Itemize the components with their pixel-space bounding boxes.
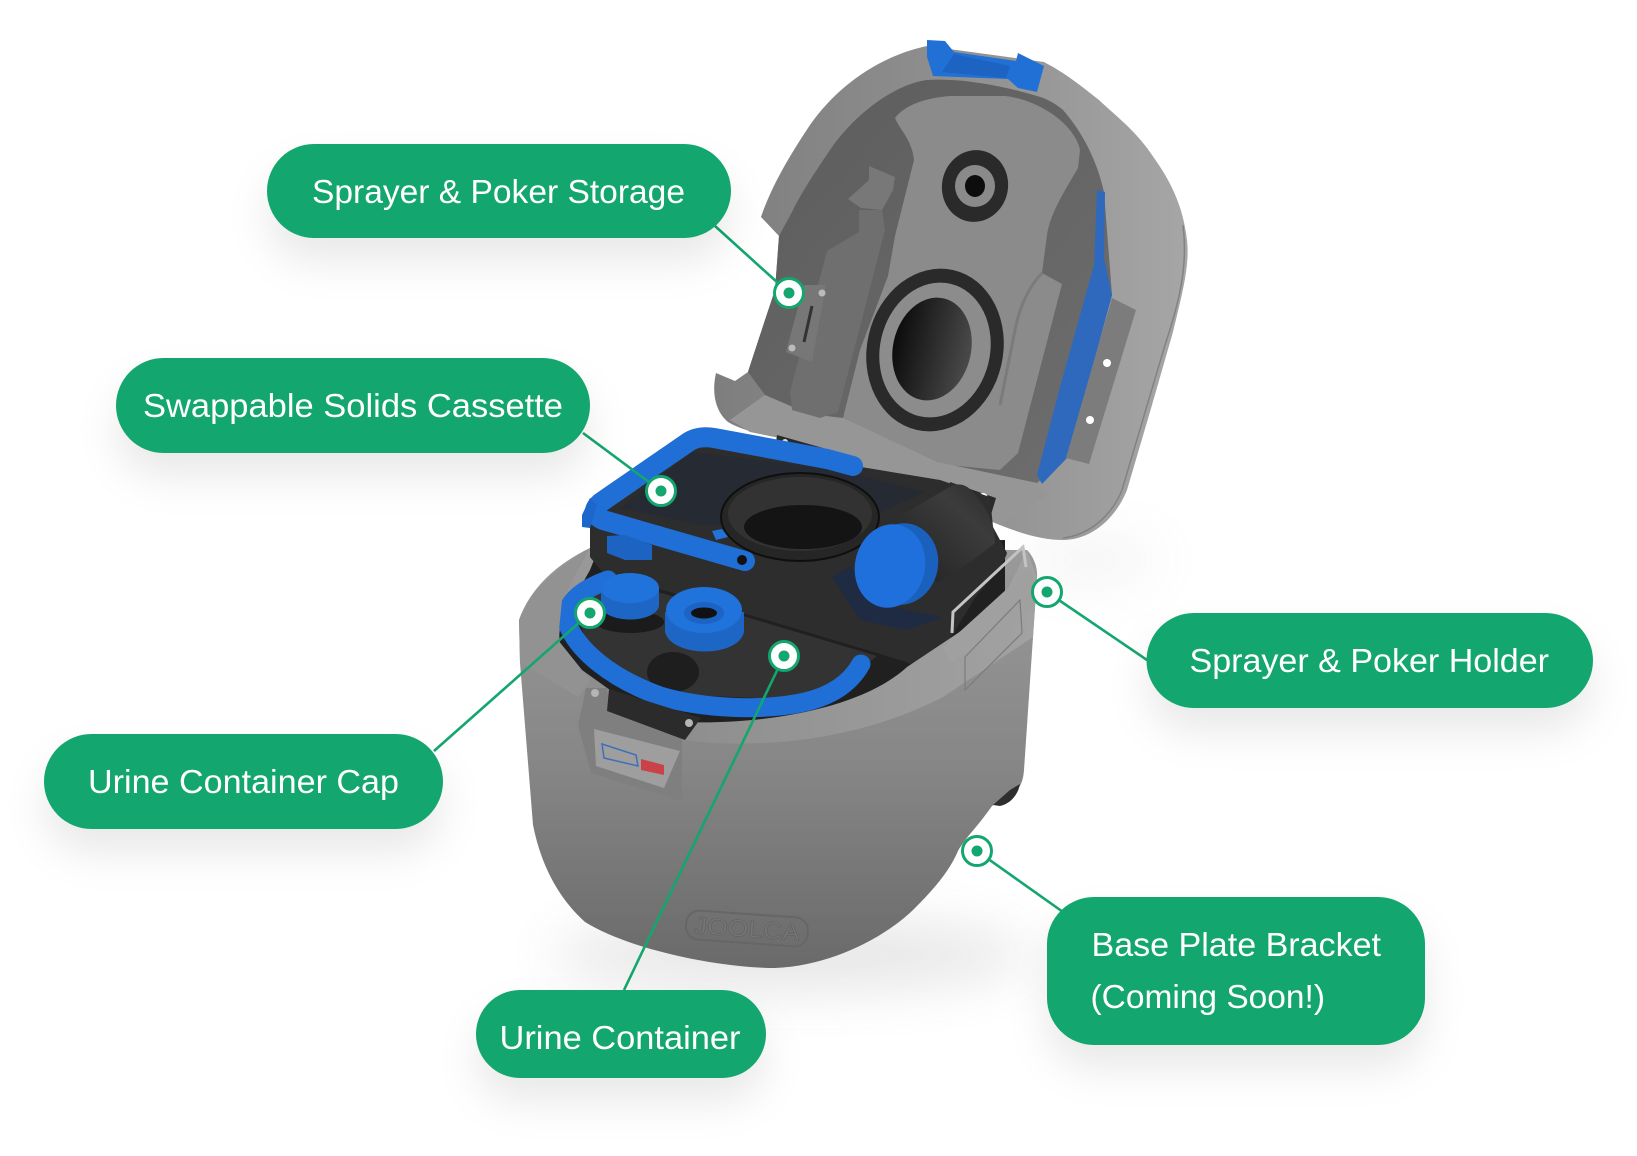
latch: [927, 40, 1044, 92]
small port: [935, 144, 1015, 228]
container recess: [647, 652, 699, 692]
callout: Swappable Solids Cassette: [116, 358, 676, 506]
callout: Sprayer & Poker Storage: [267, 144, 804, 308]
callout: Sprayer & Poker Storage: Sprayer & Poker Storage: [312, 173, 685, 210]
navy patch: [832, 567, 943, 630]
urine container: [567, 573, 877, 708]
callout: Sprayer & Poker Holder: [1032, 578, 1593, 708]
ground shadow: [550, 542, 1160, 991]
logo embossed: JOOLCA: [693, 912, 801, 947]
hinges: [775, 435, 996, 518]
level indicator window: [578, 688, 701, 801]
pour cap: [665, 587, 744, 652]
base rim: [519, 548, 1037, 744]
lid cavity: [748, 80, 1112, 483]
callout: Swappable Solids Cassette: Swappable Solids Cassette: [143, 387, 563, 424]
base body: [519, 540, 1037, 968]
side bracket: [1066, 298, 1136, 464]
callout: Base Plate Bracket (Coming Soon!): Base Plate Bracket: [1092, 926, 1381, 963]
funnel: [721, 473, 879, 561]
callout: Urine Container: [476, 642, 798, 1078]
raised center panel: [843, 96, 1080, 470]
cassette handle: [582, 437, 853, 565]
vent cap: [596, 573, 664, 633]
callout: Base Plate Bracket (Coming Soon!): [962, 836, 1425, 1045]
sprayer bottle: [790, 166, 895, 418]
callout: Urine Container Cap: Urine Container Cap: [88, 763, 399, 800]
blue seal strip: [1037, 190, 1112, 484]
callout: Urine Container: Urine Container: [500, 1019, 740, 1056]
lid: [714, 40, 1188, 540]
large port: [850, 255, 1020, 445]
callout: Sprayer & Poker Holder: Sprayer & Poker Holder: [1190, 642, 1549, 679]
solids cassette: [582, 437, 1007, 665]
callout: Base Plate Bracket (Coming Soon!): (Coming Soon!): [1090, 978, 1325, 1015]
blue screw cap: [847, 516, 946, 614]
handle latch tab: [607, 535, 652, 560]
metal handle and bracket: [943, 547, 1036, 690]
poker clip: [786, 285, 826, 362]
product: open portable toilet: [519, 40, 1188, 968]
lower lid rim: [730, 395, 1048, 525]
elbow pipe: [893, 484, 995, 583]
callout: Urine Container Cap: [44, 598, 604, 829]
container handle: [567, 580, 861, 708]
